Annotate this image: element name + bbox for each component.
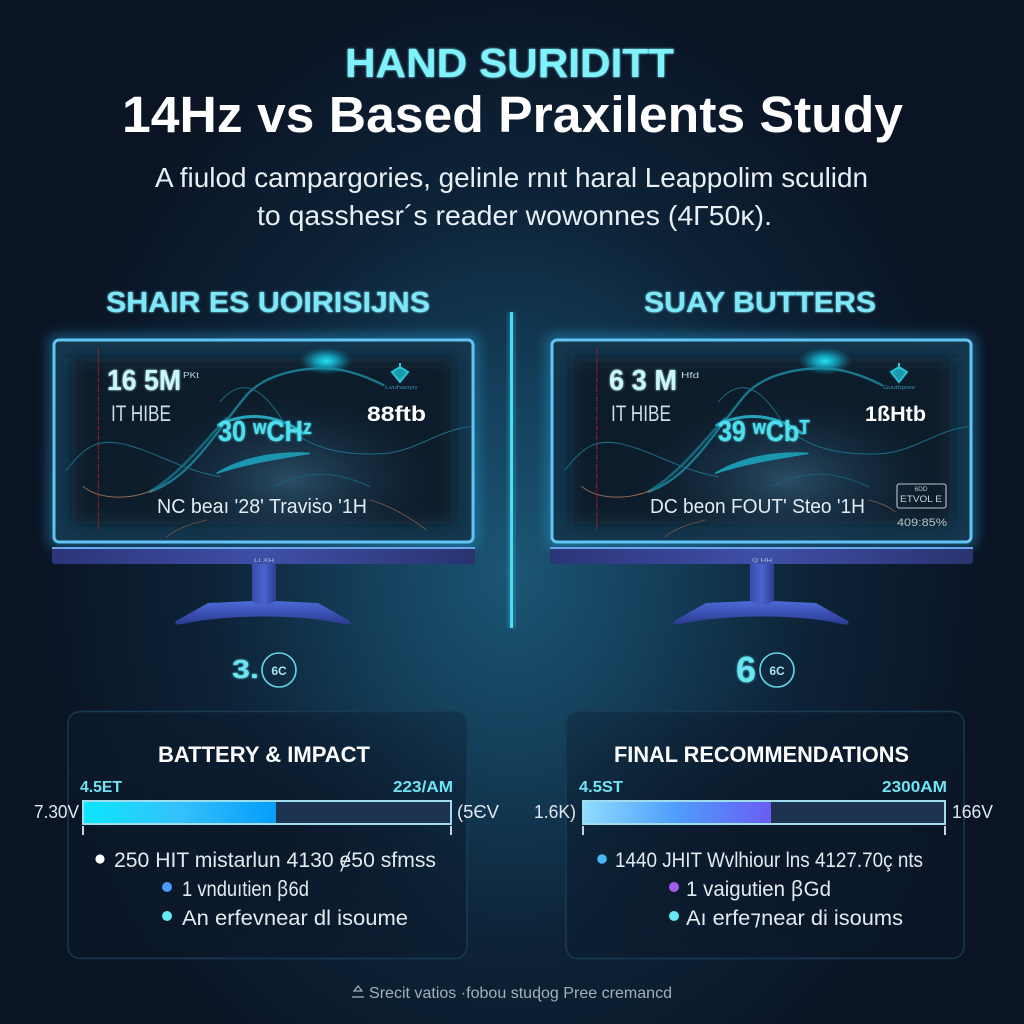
panel: final recommendations — [534, 712, 994, 958]
bar chart: 4.5ET — [80, 779, 122, 796]
stand — [175, 564, 351, 625]
stand — [673, 564, 849, 625]
panel heading: FINAL RECOMMENDATIONS — [614, 742, 909, 767]
screen — [54, 340, 473, 565]
heading: right column: SUAY BUTTERS — [644, 287, 876, 319]
footer note: Srecit vatios ·fobou stuɖog Pree cremancd — [369, 985, 672, 1002]
panel heading: BATTERY & IMPACT — [158, 742, 371, 767]
spec: resolution: 16 5M — [107, 365, 181, 397]
main title: 14Hz vs Based Praxilents Study — [122, 86, 904, 143]
bullet list: An erfevnear dl isoume — [182, 907, 408, 930]
bar chart: 2300AM — [882, 779, 947, 796]
spec: bandwidth: 88ftb — [367, 403, 426, 426]
bullet list: 1 vaigutien ꞵGd — [686, 878, 831, 902]
small stamp: 409:85% — [897, 517, 947, 529]
size badge — [232, 653, 296, 687]
bar chart — [34, 779, 500, 835]
monitor: left — [48, 334, 479, 687]
title eyebrow: HAND SURIDITT — [345, 40, 674, 86]
monitor: right — [546, 334, 977, 690]
bullet list: 1440 JHIT Wvlhiour lns 4127.70ç nts — [615, 849, 923, 872]
size badge: 3. — [232, 654, 259, 684]
subtitle: to qasshesr´s reader wowonnes (4Γ50κ). — [257, 200, 772, 231]
size badge: 6 — [736, 649, 756, 690]
subtitle — [155, 162, 868, 231]
bar chart: 7.30V — [34, 801, 80, 822]
bar chart: 166V — [952, 801, 994, 822]
bar chart: 223/AM — [393, 779, 453, 796]
bullet list — [95, 849, 436, 930]
size badge — [736, 649, 794, 690]
bezel bar — [550, 547, 973, 564]
bar chart: 4.5ST — [579, 779, 623, 796]
heading: left column: SHAIR ES UOIRISIJNS — [106, 287, 430, 319]
bezel bar: LI XH — [254, 558, 274, 564]
center divider — [507, 312, 516, 628]
spec: resolution: 6 3 M — [609, 365, 677, 397]
icon: brand logo — [385, 363, 417, 391]
title block — [122, 40, 904, 143]
icon: brand logo: Lvuhaoyo — [385, 385, 417, 391]
spec: refresh value: 39 ʷCbᵀ — [718, 416, 810, 448]
icon: brand logo: Guuthpore — [883, 385, 915, 391]
panel: battery and impact — [34, 712, 500, 958]
spec: bandwidth: 1ßHtb — [865, 403, 926, 426]
bar chart: 1.6K) — [534, 801, 576, 822]
spec: resolution: Hfd — [681, 371, 699, 380]
size badge: 6C — [769, 664, 785, 678]
bullet list: Aı erfe⁊near di isoums — [686, 907, 903, 930]
spec: label: IT HIBE — [111, 401, 171, 426]
small stamp: 6DD — [914, 486, 928, 493]
icon: brand logo — [883, 363, 915, 391]
bullet list — [597, 849, 923, 930]
bullet list: 1 vnduıtien ꞵ6d — [182, 878, 309, 902]
small stamp: ETVOL E — [900, 494, 942, 504]
bullet list: 250 HIT mistarlun 4130 ɇ50 sfmss — [114, 849, 436, 872]
bezel bar — [52, 547, 475, 564]
spec: label: IT HIBE — [611, 401, 671, 426]
screen caption: DC beon FOUT' Steo '1H — [650, 495, 865, 518]
small stamp — [897, 484, 947, 529]
screen — [552, 340, 971, 565]
bar chart — [534, 779, 994, 835]
screen caption: NC beaı '28' Traviṡo '1H — [157, 495, 367, 518]
spec: resolution: PKt — [183, 371, 200, 380]
subtitle: A fiulod campargories, gelinle rnıt haral Leappolim sculidn — [155, 162, 868, 193]
spec: refresh value: 30 ʷCHᶻ — [218, 416, 312, 448]
bar chart: (5ЄV — [457, 801, 500, 822]
size badge: 6C — [271, 664, 287, 678]
bezel bar: Q HH — [752, 558, 772, 564]
